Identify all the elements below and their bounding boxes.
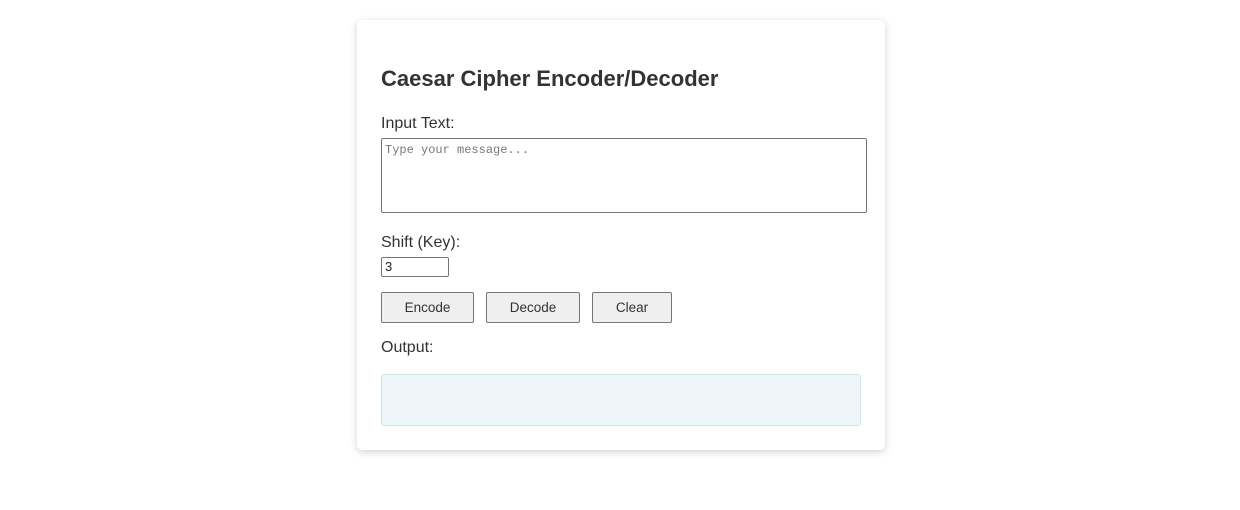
textarea: message xyxy=(381,138,867,213)
label: output: Output: xyxy=(381,339,433,356)
button: encode: Encode xyxy=(405,300,450,315)
button: decode xyxy=(486,292,580,323)
number input: shift: 3 xyxy=(385,259,392,274)
title: Caesar Cipher Encoder/Decoder xyxy=(381,66,718,91)
button: decode: Decode xyxy=(510,300,556,315)
label: input text: Input Text: xyxy=(381,115,455,132)
textarea: message: Type your message... xyxy=(385,143,529,157)
output box xyxy=(381,374,861,426)
panel: cipher card xyxy=(357,20,885,450)
button: encode xyxy=(381,292,474,323)
number input: shift xyxy=(381,257,449,277)
button: clear: Clear xyxy=(616,300,648,315)
button: clear xyxy=(592,292,672,323)
label: shift key: Shift (Key): xyxy=(381,234,460,251)
